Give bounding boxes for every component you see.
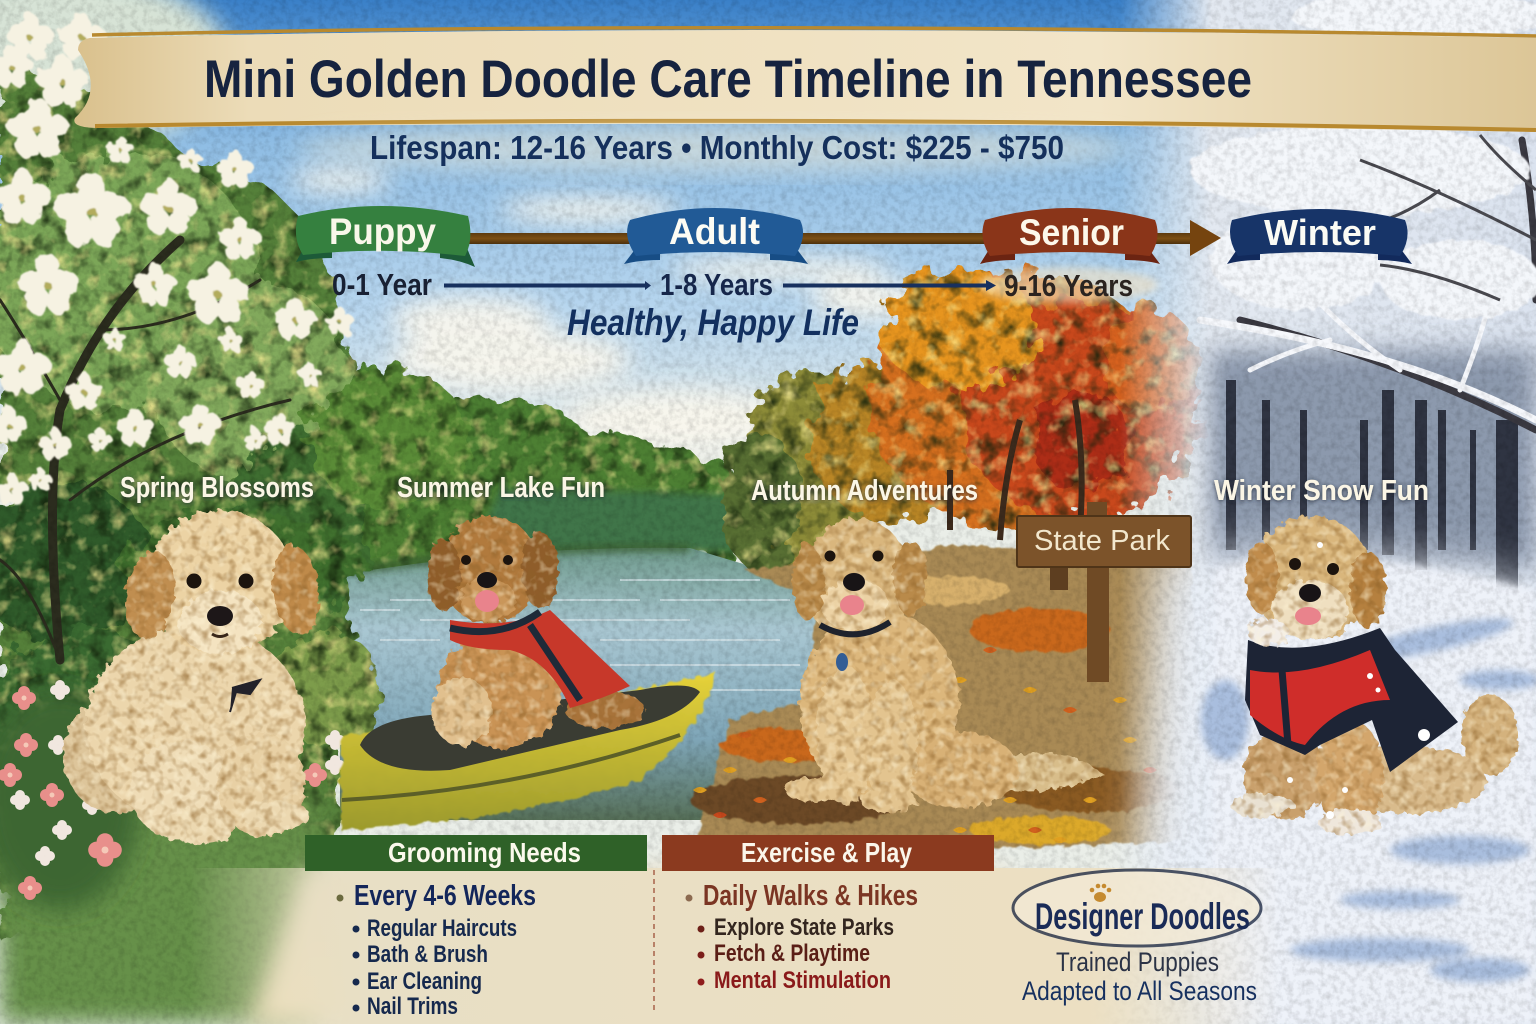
season labels (120, 472, 1429, 507)
season labels: Winter Snow Fun (1214, 475, 1429, 507)
exercise list: Explore State Parks (714, 914, 894, 941)
age ranges and arrows: 0-1 Year (332, 267, 432, 302)
ribbon: senior (980, 208, 1160, 264)
grooming list: Ear Cleaning (367, 968, 482, 995)
icon: paw (1090, 884, 1111, 902)
brand tagline: Adapted to All Seasons (1022, 976, 1257, 1006)
kayak (340, 672, 716, 830)
exercise list: Mental Stimulation (714, 967, 891, 994)
season labels: Autumn Adventures (751, 475, 978, 507)
ribbon: adult: Adult (669, 211, 760, 252)
grooming list: Nail Trims (367, 993, 458, 1020)
ribbon: winter (1227, 209, 1412, 264)
fallen leaves (693, 647, 1157, 843)
title banner (74, 28, 1536, 132)
exercise list: Daily Walks & Hikes (703, 880, 918, 912)
pink flower bushes (0, 680, 345, 910)
grooming header (305, 835, 647, 871)
brand logo: Designer Doodles: Designer Doodles (1035, 896, 1250, 937)
spring trees (0, 60, 470, 940)
ribbon: puppy (296, 206, 475, 267)
summer dog in life vest (427, 516, 645, 748)
autumn ground (690, 545, 1210, 860)
grooming list: Bath & Brush (367, 941, 488, 968)
age ranges and arrows (332, 267, 1158, 303)
sign text: State Park (1034, 525, 1170, 557)
exercise header (662, 835, 994, 871)
subtitle: lifespan and cost: Lifespan: 12-16 Years • Monthly Cost: $225 - $750 (370, 129, 1064, 166)
title: Mini Golden Doodle Care Timeline in Tennessee (204, 50, 1252, 109)
grooming header: Grooming Needs (388, 837, 581, 868)
age ranges and arrows: 9-16 Years (1004, 268, 1133, 303)
brand tagline (1022, 947, 1257, 1006)
ribbon: winter: Winter (1264, 212, 1376, 253)
winter forest and snow (1120, 0, 1536, 1024)
spring blossoms (0, 13, 354, 505)
puppy dog in spring (63, 510, 325, 844)
autumn trees (720, 270, 1200, 570)
season labels: Summer Lake Fun (397, 472, 605, 504)
grooming list: Every 4-6 Weeks (354, 880, 536, 912)
state park sign (1017, 502, 1191, 682)
exercise list (686, 880, 918, 994)
autumn dog (785, 518, 1105, 813)
lake (340, 548, 830, 820)
exercise header: Exercise & Play (741, 837, 913, 868)
distant forest hills (290, 369, 735, 580)
brand logo: Designer Doodles (1013, 870, 1261, 946)
exercise list: Fetch & Playtime (714, 940, 870, 967)
arrowhead (1190, 220, 1221, 256)
ribbon: puppy: Puppy (329, 211, 436, 252)
timeline connector (465, 220, 1221, 256)
ribbon: senior: Senior (1019, 212, 1124, 253)
season labels: Spring Blossoms (120, 472, 314, 504)
age ranges and arrows: 1-8 Years (660, 267, 773, 302)
grooming list: Regular Haircuts (367, 915, 517, 942)
grooming list (336, 880, 536, 1020)
ribbon: adult (624, 208, 808, 264)
winter dog in jacket (1230, 516, 1518, 835)
lower information panel (190, 835, 1280, 1024)
tagline: Healthy, Happy Life (567, 302, 859, 343)
brand tagline: Trained Puppies (1056, 947, 1219, 977)
